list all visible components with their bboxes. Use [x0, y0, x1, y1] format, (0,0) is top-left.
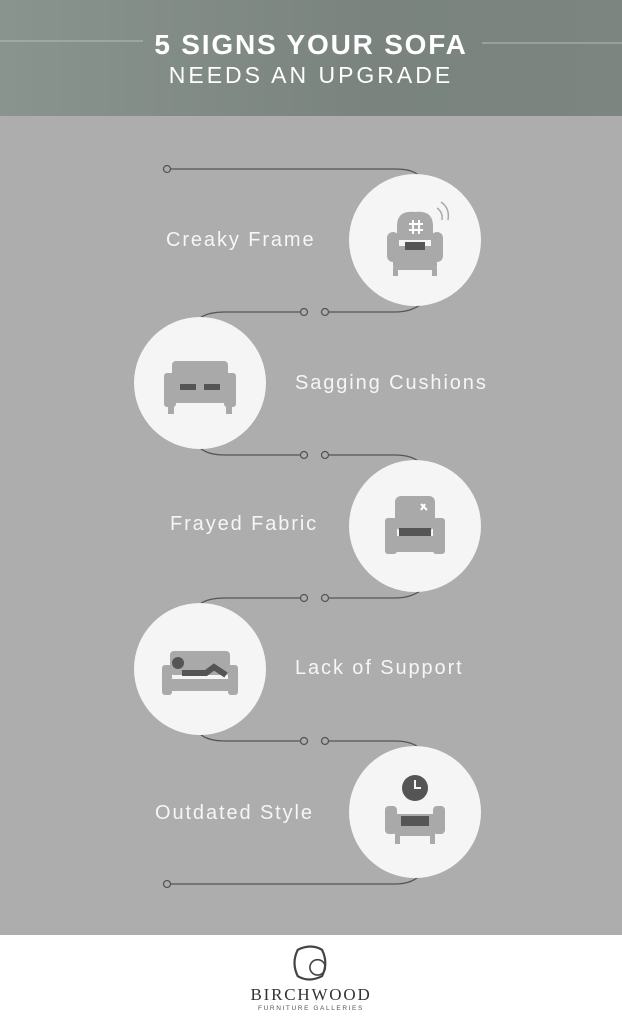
title line 2: NEEDS AN UPGRADE: [169, 62, 453, 88]
label: outdated style: Outdated Style: [155, 802, 314, 824]
icon circle: outdated style: [349, 746, 481, 878]
icon circle: lack of support: [134, 603, 266, 735]
footer: [0, 935, 622, 1024]
logo mark: [293, 945, 326, 981]
icon circle: creaky frame: [349, 174, 481, 306]
label: lack of support: Lack of Support: [295, 657, 464, 679]
title line 1: 5 SIGNS YOUR SOFA: [154, 29, 468, 60]
icon circle: frayed fabric: [349, 460, 481, 592]
logo: FURNITURE GALLERIES: [258, 1005, 364, 1012]
label: creaky frame: Creaky Frame: [166, 229, 316, 251]
logo: BIRCHWOOD: [250, 985, 372, 1004]
header: [0, 0, 622, 116]
icon circle: sagging cushions: [134, 317, 266, 449]
logo: [250, 945, 372, 1012]
label: sagging cushions: Sagging Cushions: [295, 372, 488, 394]
label: frayed fabric: Frayed Fabric: [170, 513, 318, 535]
